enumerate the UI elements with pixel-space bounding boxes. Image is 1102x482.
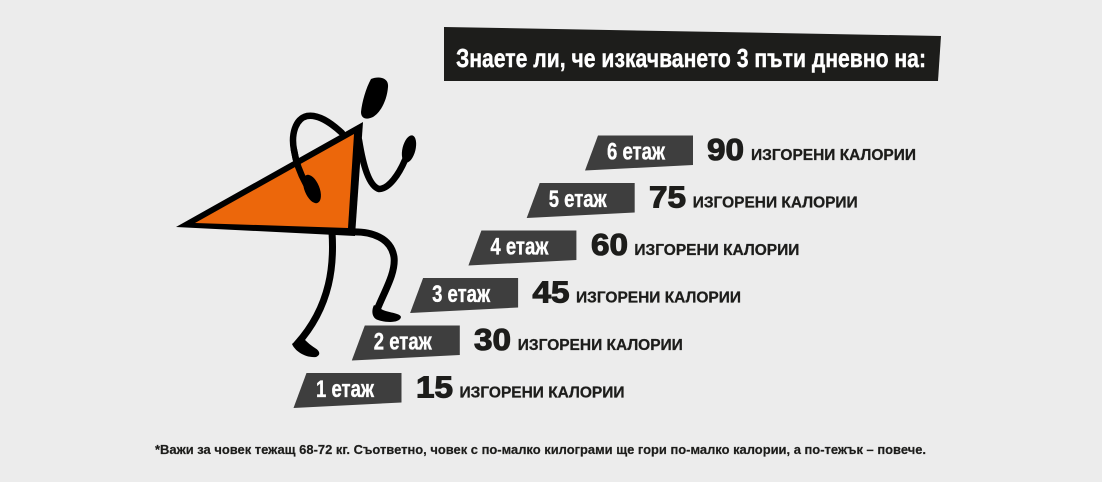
row: 5th floor: ИЗГОРЕНИ КАЛОРИИ [693,194,858,212]
row: 3rd floor: ИЗГОРЕНИ КАЛОРИИ [576,290,741,306]
row: 5th floor [527,180,858,218]
title banner [444,27,941,81]
icon: running stick figure with orange triangle [176,78,419,357]
orange triangle body [176,122,363,236]
row: 1st floor: 1 етаж [316,376,375,403]
back arm over triangle [294,150,306,184]
front leg [297,232,333,344]
row: 6th floor: ИЗГОРЕНИ КАЛОРИИ [751,147,916,164]
row: 6th floor: 90 [707,132,744,167]
front hand [399,134,419,164]
row: 4th floor: ИЗГОРЕНИ КАЛОРИИ [634,242,799,259]
back foot [372,305,401,322]
head [361,78,388,119]
row: 2nd floor: ИЗГОРЕНИ КАЛОРИИ [518,337,683,354]
back leg [350,232,394,310]
row: 1st floor: 15 [416,370,453,404]
row: 3rd floor: 3 етаж [432,281,491,308]
row: 3rd floor [410,274,741,313]
row: 3rd floor: 45 [532,274,570,310]
row: 5th floor: 5 етаж [549,186,607,213]
back hand [299,172,325,206]
back arm [293,116,342,184]
row: 6th floor: 6 етаж [607,138,666,166]
row: 2nd floor: 2 етаж [374,328,433,356]
row: 6th floor [585,132,916,170]
front foot [292,336,319,357]
row: 5th floor: 75 [649,180,686,214]
row: 1st floor [294,370,624,408]
footnote: *Важи за човек тежащ 68-72 кг. Съответно, човек с по-малко килограми ще гори по-малко калории, а по-тежък – повече. [155,442,926,457]
front arm [359,140,405,189]
row: 2nd floor: 30 [474,322,511,357]
row: 2nd floor [352,322,683,360]
title banner: Знаете ли, че изкачването 3 пъти дневно на: [456,43,926,73]
row: 4th floor [468,227,799,266]
row: 4th floor: 4 етаж [490,234,549,260]
row: 4th floor: 60 [591,227,628,262]
row: 1st floor: ИЗГОРЕНИ КАЛОРИИ [460,384,624,402]
